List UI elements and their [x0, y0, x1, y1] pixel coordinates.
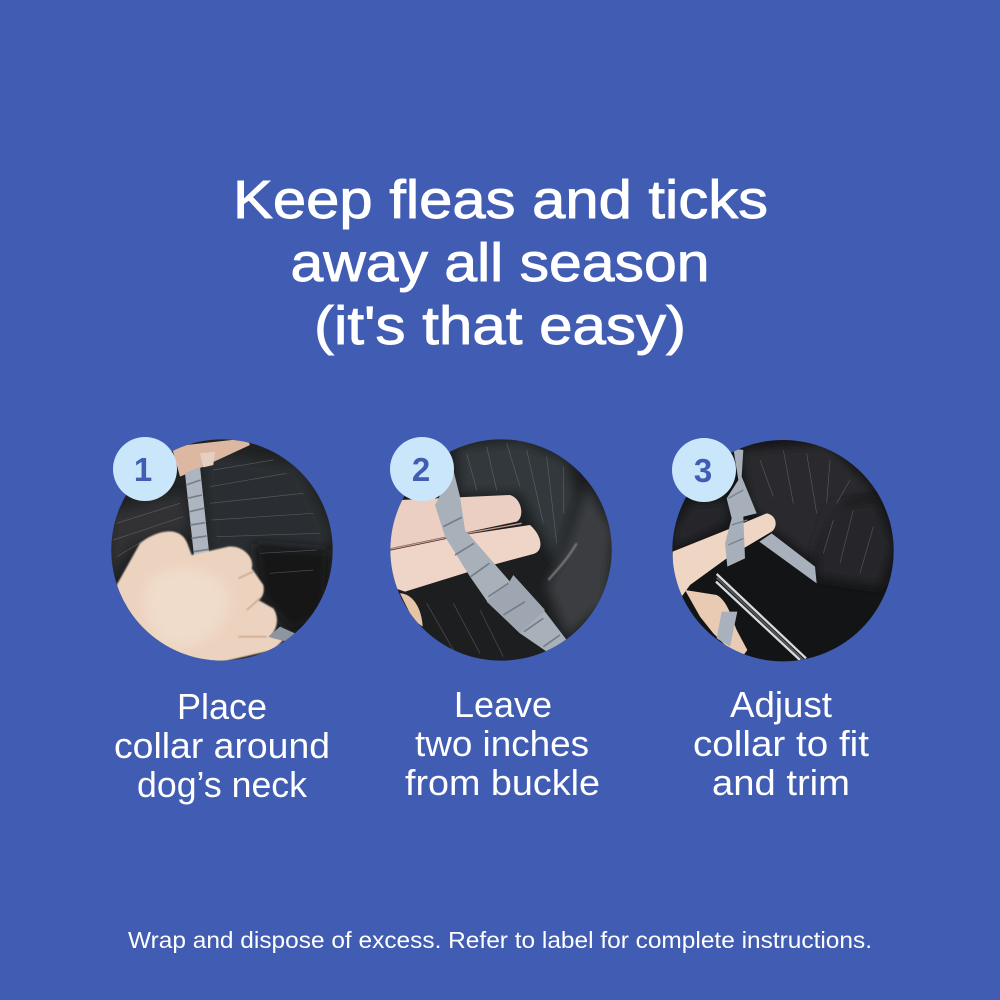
step 2 caption: two inches	[415, 723, 589, 764]
step 3 caption: and trim	[712, 762, 850, 803]
collar	[435, 470, 567, 652]
title: Keep fleas and ticks	[233, 170, 768, 230]
step 1 number badge	[113, 437, 177, 501]
finger at top	[172, 438, 250, 477]
fur strands	[113, 460, 320, 573]
fur	[740, 443, 877, 560]
collar end	[268, 627, 295, 642]
hand	[117, 531, 283, 670]
collar strip	[725, 448, 757, 567]
step 1 caption: dog’s neck	[137, 764, 308, 805]
step 1 photo: hand placing collar on dog's neck	[111, 439, 333, 661]
title: (it's that easy)	[314, 296, 686, 356]
collar	[185, 467, 209, 556]
footnote: Wrap and dispose of excess. Refer to label for complete instructions.	[128, 927, 872, 953]
step 3 number badge: 3	[694, 452, 712, 489]
fur strands	[427, 443, 563, 657]
step 2 photo: two fingers under collar	[390, 439, 612, 661]
step 2 number badge	[390, 437, 454, 501]
step 3 number badge	[672, 438, 736, 502]
step 3 photo: trimming collar with scissors	[672, 440, 894, 662]
step 1 caption: collar around	[114, 725, 330, 766]
fur highlight	[204, 456, 332, 572]
fur strands	[760, 450, 873, 573]
step 3 caption: collar to fit	[693, 723, 869, 764]
step 1 caption: Place	[177, 686, 267, 727]
step 2 number badge: 2	[412, 451, 430, 488]
fur	[457, 440, 577, 563]
step 3 caption: Adjust	[730, 684, 832, 725]
title	[233, 170, 768, 356]
step 2 caption: Leave	[454, 684, 552, 725]
title: away all season	[290, 233, 710, 293]
collar band	[759, 533, 817, 583]
step 3 caption	[693, 684, 869, 803]
scissors	[716, 574, 806, 660]
fingers	[390, 495, 521, 548]
hand and finger	[673, 513, 776, 597]
step 1 number badge: 1	[134, 451, 152, 488]
step 2 caption: from buckle	[405, 762, 600, 803]
cut collar piece	[717, 612, 737, 647]
step 1 caption	[114, 686, 330, 805]
step 2 caption	[405, 684, 600, 803]
